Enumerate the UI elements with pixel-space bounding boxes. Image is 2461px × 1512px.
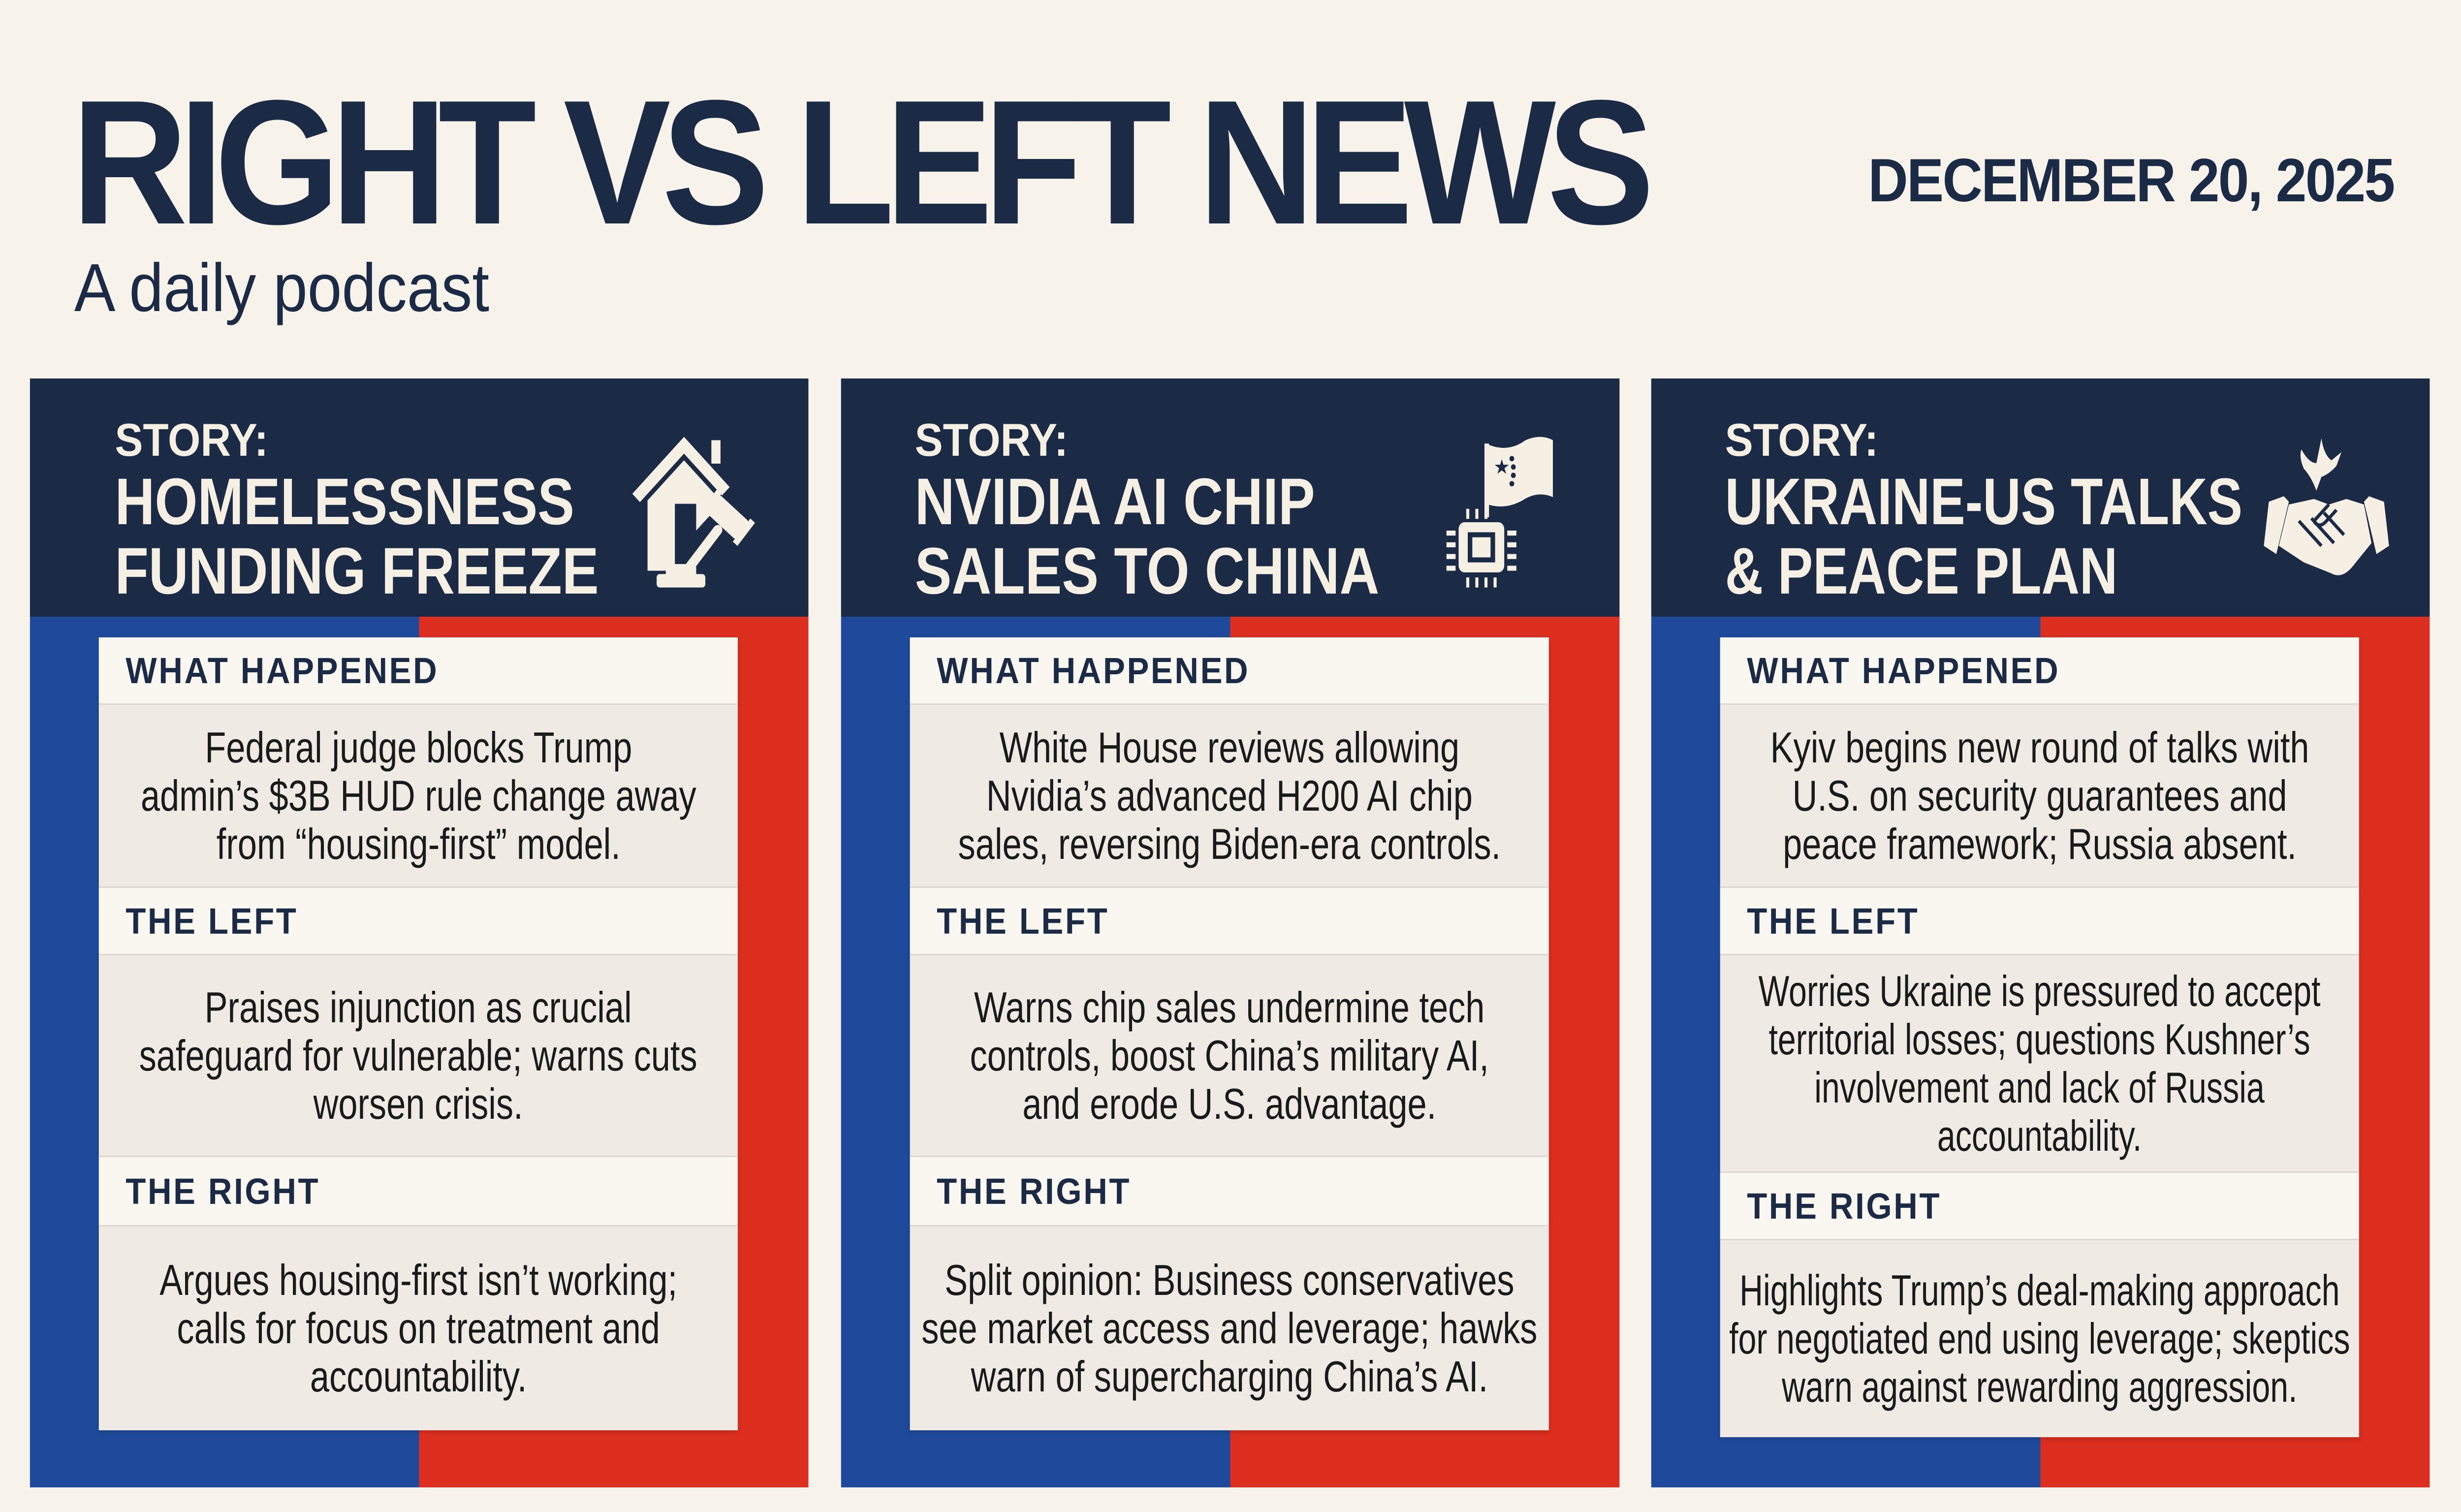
label: the left: THE LEFT [937, 901, 1109, 941]
text: the left: Warns chip sales undermine tech [974, 982, 1484, 1032]
text: what happened: Nvidia’s advanced H200 AI chip [986, 771, 1473, 820]
text: what happened [958, 723, 1501, 868]
panel header: nvidia [841, 378, 1619, 617]
text: the left [1758, 967, 2321, 1160]
card: homelessness [99, 637, 738, 1430]
text: the right: Highlights Trump’s deal-making approach [1739, 1266, 2340, 1315]
card: nvidia [910, 637, 1549, 1430]
story label: STORY: [915, 414, 1068, 466]
text: the left: Praises injunction as crucial [205, 982, 632, 1032]
story title: NVIDIA AI CHIP [915, 465, 1315, 538]
icon: dove and handshake [2264, 438, 2389, 575]
panel: nvidia [841, 378, 1619, 1487]
text: what happened: from “housing-first” model. [216, 819, 620, 868]
text: what happened: sales, reversing Biden-era controls. [958, 819, 1501, 868]
icon: chip and china flag [1446, 437, 1553, 588]
text: the left: accountability. [1937, 1111, 2142, 1160]
text: what happened: peace framework; Russia absent. [1783, 819, 2297, 868]
date: DECEMBER 20, 2025 [1868, 147, 2394, 215]
panel header: ukraine [1651, 378, 2429, 617]
label: what happened: WHAT HAPPENED [126, 650, 439, 691]
text: what happened: Federal judge blocks Trump [205, 723, 632, 772]
text: what happened: Kyiv begins new round of talks with [1770, 723, 2309, 772]
text: the right: warn of supercharging China’s AI. [971, 1352, 1488, 1401]
label: the right [99, 1156, 738, 1227]
label: the left [1720, 886, 2359, 955]
text: the left [970, 982, 1489, 1128]
text: the right: calls for focus on treatment and [177, 1304, 660, 1353]
label: the left [910, 886, 1549, 955]
text: the left: territorial losses; questions Kushner’s [1769, 1015, 2310, 1063]
icon: house and gavel [632, 437, 755, 588]
text: the right [1729, 1266, 2350, 1411]
text: the right: for negotiated end using leverage; skeptics [1729, 1314, 2350, 1363]
text: the left [139, 982, 697, 1128]
story title [1725, 465, 2242, 608]
text: the right: accountability. [310, 1352, 527, 1401]
text: what happened: U.S. on security guarantees and [1792, 771, 2287, 820]
label: the right [1720, 1171, 2359, 1240]
text: the right: Argues housing-first isn’t working; [159, 1256, 677, 1304]
text: the left: involvement and lack of Russia [1814, 1063, 2265, 1111]
story label: STORY: [115, 414, 268, 466]
text: what happened: admin’s $3B HUD rule change away [140, 771, 696, 820]
story title [915, 465, 1379, 608]
text: what happened [1770, 723, 2309, 868]
label: what happened [1720, 637, 2359, 705]
text: the left: Worries Ukraine is pressured to accept [1759, 967, 2321, 1015]
label: the left: THE LEFT [126, 901, 298, 941]
label: the right: THE RIGHT [937, 1170, 1131, 1212]
text: the right: see market access and leverage; hawks [921, 1304, 1537, 1353]
label: what happened: WHAT HAPPENED [1747, 650, 2060, 691]
text: the right: Split opinion: Business conservatives [945, 1256, 1514, 1304]
panel header: homelessness [30, 378, 808, 617]
story title: UKRAINE-US TALKS [1725, 465, 2242, 538]
label: the right: THE RIGHT [1747, 1185, 1941, 1227]
icon: chip and china flag: ★ [1494, 456, 1510, 478]
text: the right: warn against rewarding aggression. [1782, 1362, 2298, 1411]
text: what happened [140, 723, 696, 868]
title: RIGHT VS LEFT NEWS [71, 63, 1645, 261]
label: the right: THE RIGHT [126, 1170, 320, 1212]
story title [115, 465, 599, 608]
panel: ukraine [1651, 378, 2429, 1487]
text: the left: worsen crisis. [314, 1079, 523, 1128]
text: the right [921, 1256, 1537, 1401]
story title: HOMELESSNESS [115, 465, 574, 538]
text: the right [159, 1256, 677, 1401]
story title: FUNDING FREEZE [115, 535, 599, 608]
label: what happened: WHAT HAPPENED [937, 650, 1250, 691]
subtitle: A daily podcast [74, 250, 489, 326]
card: ukraine [1720, 637, 2359, 1437]
text: what happened: White House reviews allowing [999, 723, 1459, 772]
label: what happened [99, 637, 738, 705]
label: the right [910, 1156, 1549, 1227]
label: the left: THE LEFT [1747, 901, 1919, 941]
story label: STORY: [1725, 414, 1878, 466]
text: the left: safeguard for vulnerable; warns cuts [139, 1031, 697, 1080]
story title: SALES TO CHINA [915, 535, 1379, 608]
panel: homelessness [30, 378, 808, 1487]
story title: & PEACE PLAN [1725, 535, 2117, 608]
text: the left: and erode U.S. advantage. [1022, 1079, 1436, 1128]
text: the left: controls, boost China’s military AI, [970, 1031, 1489, 1080]
label: the left [99, 886, 738, 955]
label: what happened [910, 637, 1549, 705]
